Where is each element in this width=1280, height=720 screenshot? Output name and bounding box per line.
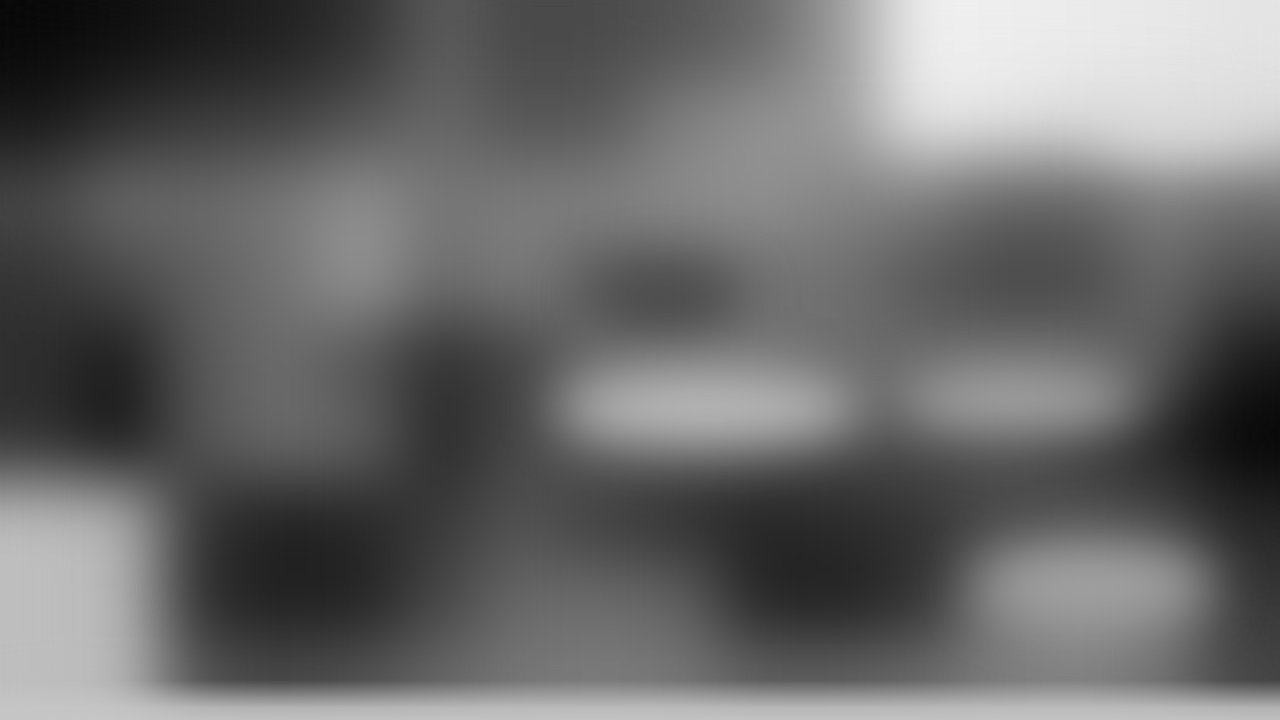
soft highlight and shadow blobs bbox=[555, 103, 1275, 621]
bright floor strip along the bottom edge bbox=[0, 680, 1280, 720]
